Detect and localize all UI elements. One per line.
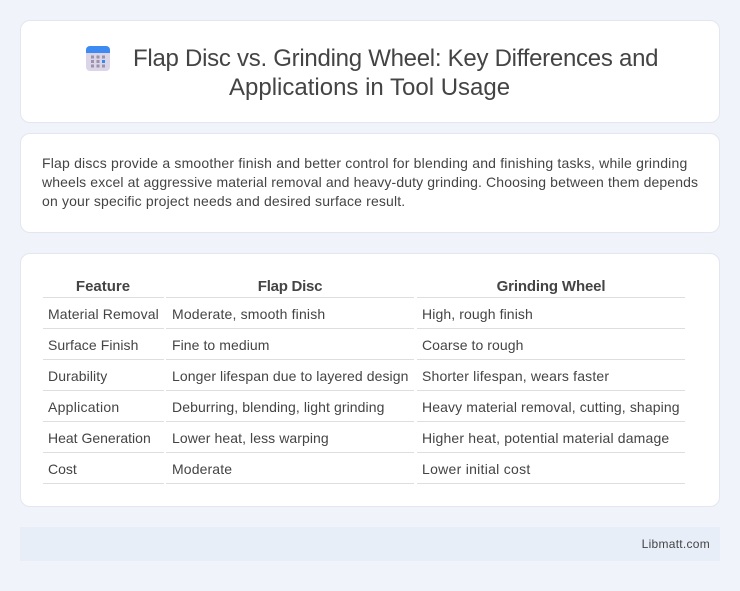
row: Material Removal: Material Removal: [48, 306, 159, 322]
row: Cost: Moderate: [172, 461, 232, 477]
panel: intro: [20, 133, 720, 233]
row: Durability: [43, 359, 685, 384]
intro text: Flap discs provide a smoother finish and better control for blending and finishing tasks, while grinding: [42, 155, 687, 171]
table header: Flap Disc: [258, 278, 322, 295]
row: Cost: Cost: [48, 461, 77, 477]
row: Material Removal: Moderate, smooth finish: [172, 306, 325, 322]
row: Surface Finish: [43, 328, 685, 353]
row: Cost: Lower initial cost: [422, 461, 531, 477]
title: Applications in Tool Usage: [229, 74, 510, 101]
footer brand: Libmatt.com: [642, 537, 710, 551]
panel: title card: [20, 20, 720, 123]
table header: Feature: [76, 278, 130, 295]
row: Application: Application: [48, 399, 119, 415]
table header: Grinding Wheel: [497, 278, 605, 295]
row: Material Removal: High, rough finish: [422, 306, 533, 322]
table header: [76, 278, 605, 295]
panel: comparison table: [20, 253, 720, 507]
intro text: [42, 155, 698, 209]
row: Cost: [43, 452, 685, 484]
row: Surface Finish: Fine to medium: [172, 337, 269, 353]
row: Heat Generation: Higher heat, potential material damage: [422, 430, 669, 446]
row: Surface Finish: Coarse to rough: [422, 337, 523, 353]
row: Application: Heavy material removal, cutting, shaping: [422, 399, 680, 415]
row: Durability: Durability: [48, 368, 107, 384]
row: Durability: Longer lifespan due to layered design: [172, 368, 408, 384]
row: Material Removal: [43, 297, 685, 322]
intro text: wheels excel at aggressive material removal and heavy-duty grinding. Choosing between them depends: [42, 174, 698, 190]
row: Durability: Shorter lifespan, wears faster: [422, 368, 609, 384]
row: Surface Finish: Surface Finish: [48, 337, 138, 353]
row: Heat Generation: Heat Generation: [48, 430, 151, 446]
intro text: on your specific project needs and desired surface result.: [42, 193, 405, 209]
title: Flap Disc vs. Grinding Wheel: Key Differences and: [133, 45, 658, 72]
row: Application: Deburring, blending, light grinding: [172, 399, 385, 415]
row: Heat Generation: [43, 421, 685, 446]
title: [133, 45, 658, 101]
row: Application: [43, 390, 685, 415]
icon: calendar: [86, 46, 110, 71]
row: Heat Generation: Lower heat, less warping: [172, 430, 329, 446]
footer: [20, 527, 720, 561]
